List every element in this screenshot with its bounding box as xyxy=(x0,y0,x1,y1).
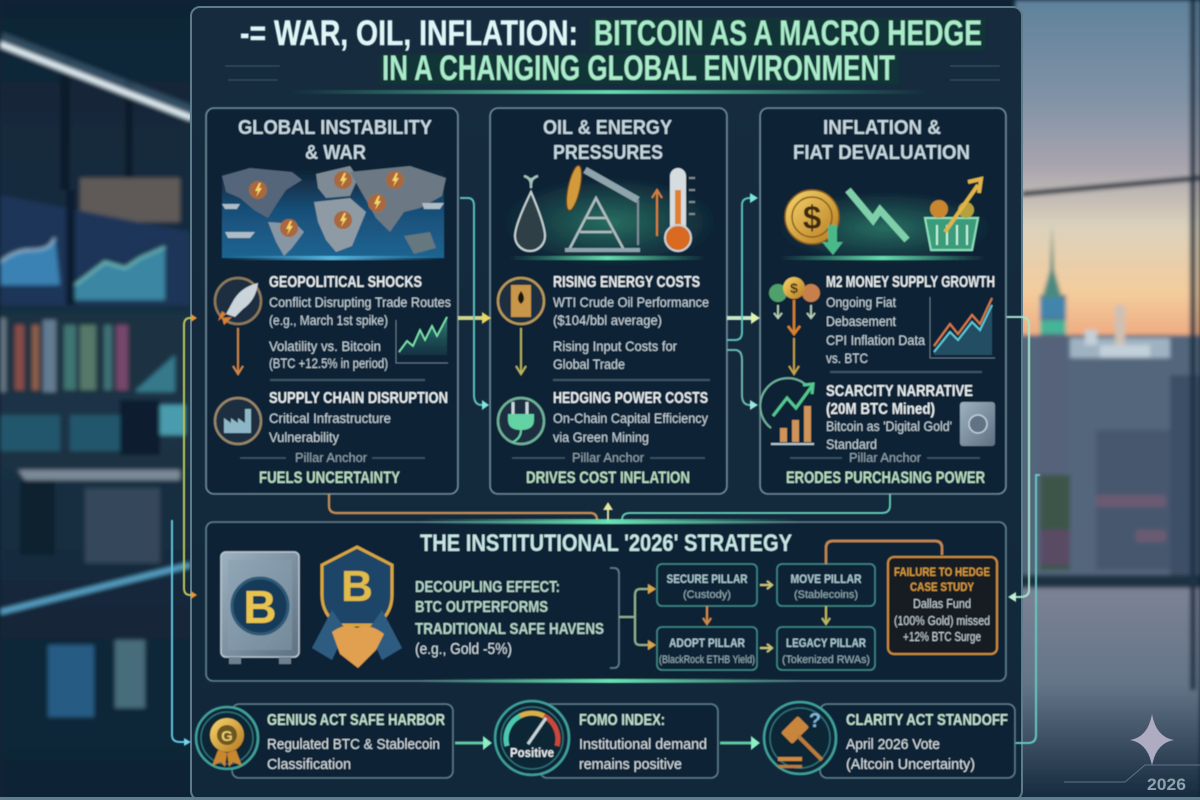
title xyxy=(240,14,985,88)
title: IN A CHANGING GLOBAL ENVIRONMENT xyxy=(382,49,895,88)
icon: factory xyxy=(215,398,261,444)
icon: pumpjack xyxy=(563,164,640,250)
text block: scarcity narrative: Bitcoin as 'Digital Gold' xyxy=(826,418,952,434)
icon: shopping basket with rising arrow xyxy=(925,179,981,250)
pillar box: move: MOVE PILLAR xyxy=(790,574,862,586)
icon: bitcoin safe xyxy=(221,552,299,664)
icon: gauge xyxy=(506,713,558,760)
text block: hedging power costs: via Green Mining xyxy=(553,429,649,445)
text block: Classification xyxy=(267,756,351,773)
icon: gavel with question mark: ? xyxy=(809,710,821,732)
text block xyxy=(579,712,707,773)
text block: geopolitical shocks: Conflict Disrupting Trade Routes xyxy=(269,294,451,310)
text block: geopolitical shocks: (BTC +12.5% in period) xyxy=(269,355,388,371)
text block: decoupling effect: DECOUPLING EFFECT: xyxy=(415,579,560,596)
icon: rising bar chart xyxy=(760,378,814,444)
pillar box: move xyxy=(777,564,875,606)
text block: rising energy costs: RISING ENERGY COSTS xyxy=(553,274,700,291)
panel: inflation and fiat devaluation xyxy=(760,108,1006,494)
pillar box: legacy: LEGACY PILLAR xyxy=(786,638,867,650)
text block: rising energy costs xyxy=(553,274,709,372)
mini chart: bitcoin rally xyxy=(396,317,448,363)
icon: gauge: Positive xyxy=(510,745,554,760)
pillar box: secure: SECURE PILLAR xyxy=(666,574,748,586)
icon: bitcoin safe: B xyxy=(243,581,277,633)
text block: CLARITY ACT STANDOFF xyxy=(846,712,1008,729)
text block: Institutional demand xyxy=(579,736,707,753)
pillar anchor: drives cost inflation: Pillar Anchor xyxy=(572,450,645,465)
background: trading floor office on the left xyxy=(0,0,200,800)
pillar box: adopt xyxy=(657,627,757,670)
pillar anchor: erodes purchasing power: ERODES PURCHASING POWER xyxy=(786,468,985,487)
connector: right rail xyxy=(1006,317,1040,743)
text block: m2 money supply growth: Ongoing Fiat xyxy=(826,294,896,310)
icon: falling dollar coin: $ xyxy=(803,199,821,236)
icon: thermometer with rising arrow xyxy=(652,168,695,251)
text block: (Altcoin Uncertainty) xyxy=(846,756,975,773)
heading: GLOBAL INSTABILITY xyxy=(238,117,433,139)
text block: decoupling effect: (e.g., Gold -5%) xyxy=(415,641,512,658)
icon: falling coins xyxy=(769,277,820,334)
text block: rising energy costs: Rising Input Costs for xyxy=(553,338,677,354)
text block: rising energy costs: WTI Crude Oil Performance xyxy=(553,294,709,310)
icon: vault xyxy=(960,402,995,446)
pillar box: adopt: (BlackRock ETHB Yield) xyxy=(659,654,755,666)
text block: rising energy costs: ($104/bbl average) xyxy=(553,312,662,328)
text block: geopolitical shocks: Volatility vs. Bitcoin xyxy=(269,338,381,354)
text block: supply chain disruption xyxy=(269,390,448,445)
text block: decoupling effect: TRADITIONAL SAFE HAVENS xyxy=(415,621,604,638)
text block: remains positive xyxy=(579,756,682,773)
text block: geopolitical shocks: (e.g., March 1st spike) xyxy=(269,312,388,328)
text block: m2 money supply growth: CPI Inflation Data xyxy=(826,332,925,348)
arrow: panel one to panel two xyxy=(458,198,491,410)
card: genius act safe harbor xyxy=(196,704,453,778)
background: city skyline through window on the right xyxy=(1015,0,1200,800)
connector: circuit line into pillar row, left rail xyxy=(172,314,197,746)
card: fomo index xyxy=(495,701,718,778)
text block: m2 money supply growth: Debasement xyxy=(826,313,896,329)
text block: scarcity narrative xyxy=(826,383,973,452)
callout: failure to hedge case study: CASE STUDY xyxy=(910,580,974,594)
text block: scarcity narrative: Standard xyxy=(826,436,877,452)
text block: m2 money supply growth xyxy=(826,274,995,366)
icon: medal xyxy=(210,718,244,767)
heading xyxy=(793,117,970,164)
pillar anchor: drives cost inflation xyxy=(526,450,690,487)
pillar anchor: drives cost inflation: DRIVES COST INFLATION xyxy=(526,468,690,487)
2026 watermark with star: 2026 xyxy=(1147,775,1186,794)
pillar anchor: fuels uncertainty: FUELS UNCERTAINTY xyxy=(259,468,401,487)
text block: rising energy costs: Global Trade xyxy=(553,356,625,372)
pillar anchor: erodes purchasing power: Pillar Anchor xyxy=(849,450,922,465)
icon: shield and handshake xyxy=(312,547,402,668)
panel: institutional 2026 strategy xyxy=(206,519,1006,683)
text block: hedging power costs xyxy=(553,390,708,445)
text block: geopolitical shocks xyxy=(269,274,451,371)
text block: Regulated BTC & Stablecoin xyxy=(267,736,440,753)
text block: scarcity narrative: SCARCITY NARRATIVE xyxy=(826,383,973,400)
text block: GENIUS ACT SAFE HARBOR xyxy=(267,712,445,729)
text block xyxy=(267,712,445,773)
text block: decoupling effect: BTC OUTPERFORMS xyxy=(415,599,548,616)
arrow: panel two to panel three xyxy=(727,193,760,410)
arrow xyxy=(233,328,243,374)
pillar box: secure: (Custody) xyxy=(683,589,731,601)
icon: gavel with question mark xyxy=(778,710,822,768)
heading xyxy=(543,117,673,164)
line chart: cpi vs btc xyxy=(930,297,995,358)
callout: failure to hedge case study: Dallas Fund xyxy=(913,597,971,611)
icon: shield and handshake: B xyxy=(341,562,373,611)
icon: falling coins: $ xyxy=(790,280,798,296)
callout: failure to hedge case study: +12% BTC Surge xyxy=(903,630,981,644)
text block: supply chain disruption: Critical Infrastructure xyxy=(269,410,391,426)
heading: INFLATION & xyxy=(823,117,941,139)
heading: & WAR xyxy=(305,142,366,164)
text block: FOMO INDEX: xyxy=(579,712,665,729)
arrow xyxy=(516,328,526,374)
pillar box: adopt: ADOPT PILLAR xyxy=(669,638,746,650)
bracket and fork to pillars xyxy=(610,568,656,668)
icon: oil drop xyxy=(515,176,545,251)
heading: OIL & ENERGY xyxy=(543,117,673,139)
text block: supply chain disruption: Vulnerability xyxy=(269,429,339,445)
pillar anchor: fuels uncertainty: Pillar Anchor xyxy=(295,450,368,465)
arrow: genius to fomo xyxy=(455,736,492,750)
icon: power plug xyxy=(498,398,544,444)
pillar box: move: (Stablecoins) xyxy=(794,589,858,601)
text block: hedging power costs: On-Chain Capital Efficiency xyxy=(553,410,708,426)
icon: falling dollar coin xyxy=(785,190,843,255)
icon: zigzag down arrow xyxy=(848,190,907,240)
heading: PRESSURES xyxy=(553,142,663,164)
icon: world map with conflict markers xyxy=(222,166,446,258)
pillar anchor: erodes purchasing power xyxy=(786,450,985,487)
pillar box: legacy xyxy=(777,627,875,670)
callout: failure to hedge case study: FAILURE TO HEDGE xyxy=(894,565,990,579)
pillar anchor: fuels uncertainty xyxy=(259,450,401,487)
title: BITCOIN AS A MACRO HEDGE xyxy=(594,14,982,53)
icon: rocket xyxy=(215,278,261,325)
text block xyxy=(846,712,1008,773)
arrow: fomo to clarity xyxy=(720,736,760,750)
text block: scarcity narrative: (20M BTC Mined) xyxy=(826,401,935,418)
icon: oil barrel xyxy=(498,278,544,324)
arrow xyxy=(789,338,799,374)
panel: oil and energy pressures xyxy=(490,108,727,494)
arrows between pillars xyxy=(703,541,942,652)
callout: failure to hedge case study xyxy=(888,557,997,654)
main infographic panel xyxy=(191,7,1022,800)
icon: medal: G xyxy=(221,728,233,745)
text block: hedging power costs: HEDGING POWER COSTS xyxy=(553,390,708,407)
card: clarity act standoff xyxy=(764,702,1015,778)
title: -= WAR, OIL, INFLATION: xyxy=(240,14,578,53)
text block: geopolitical shocks: GEOPOLITICAL SHOCKS xyxy=(269,274,422,291)
text block: supply chain disruption: SUPPLY CHAIN DISRUPTION xyxy=(269,390,448,407)
heading xyxy=(238,117,433,164)
pillar box: legacy: (Tokenized RWAs) xyxy=(782,654,870,666)
heading: FIAT DEVALUATION xyxy=(793,142,970,164)
panel: global instability and war xyxy=(206,108,458,494)
arrows: panels down into strategy xyxy=(329,494,890,522)
2026 watermark with star xyxy=(1064,714,1200,794)
pillar box: secure xyxy=(657,564,757,606)
heading: THE INSTITUTIONAL '2026' STRATEGY xyxy=(420,530,792,557)
text block: m2 money supply growth: M2 MONEY SUPPLY GROWTH xyxy=(826,274,995,291)
callout: failure to hedge case study: (100% Gold) missed xyxy=(894,614,990,628)
text block: m2 money supply growth: vs. BTC xyxy=(826,350,868,366)
text block: April 2026 Vote xyxy=(846,736,940,753)
text block: decoupling effect xyxy=(415,579,604,658)
